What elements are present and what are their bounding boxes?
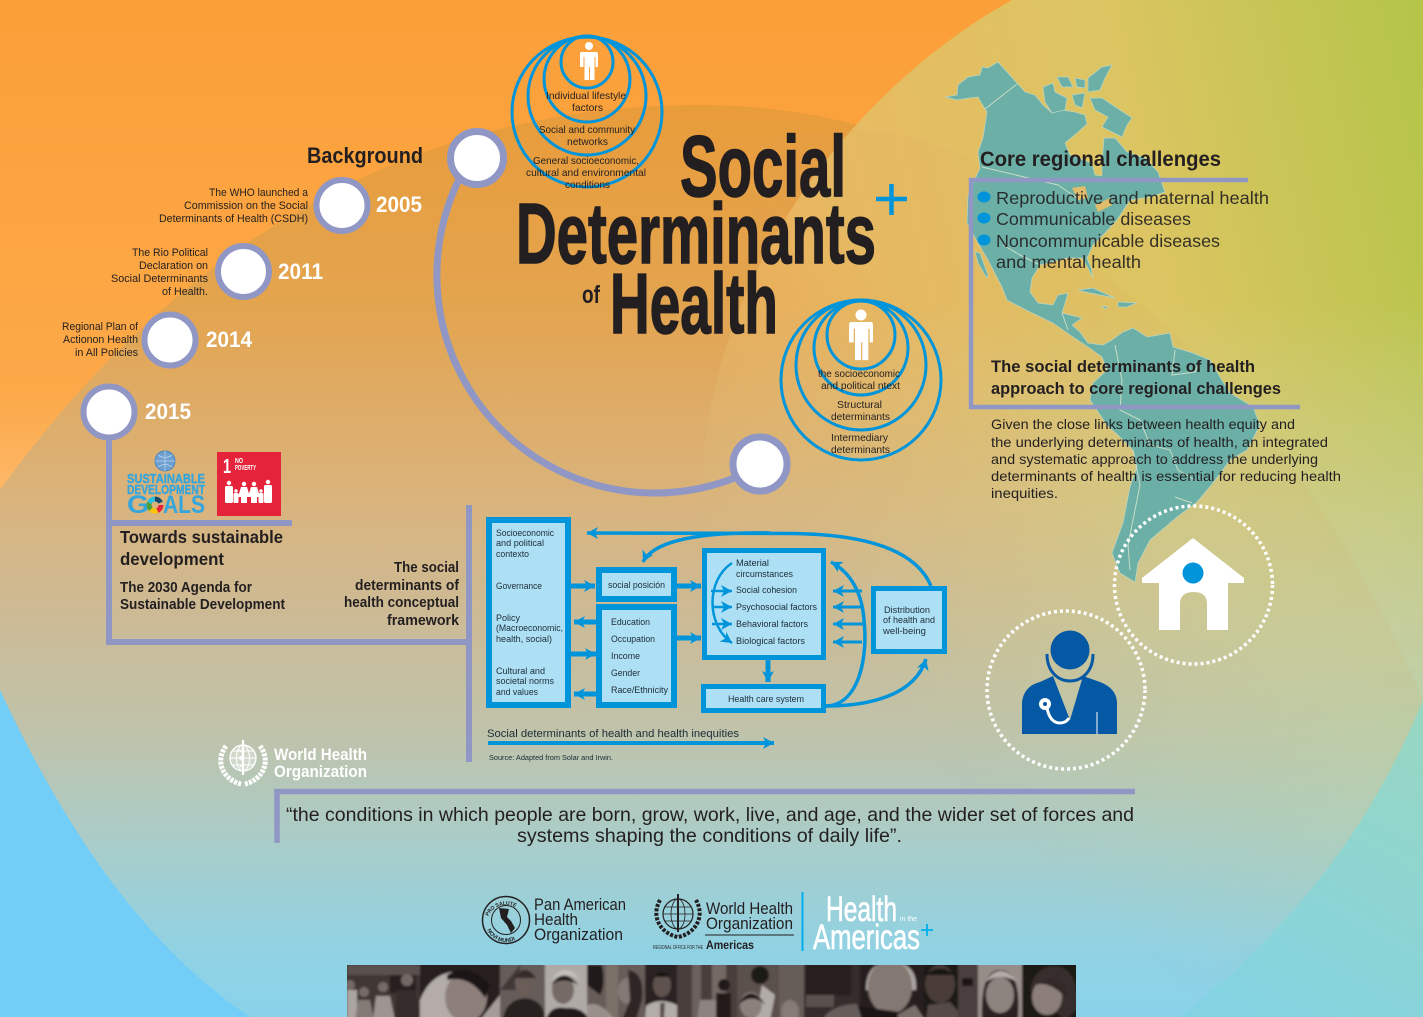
panel: context box: contexto — [496, 549, 529, 559]
panel: context box: Cultural and — [496, 666, 545, 676]
logo: world health organization americas: Organization — [706, 914, 793, 933]
text: towards sustainable development: Towards sustainable — [120, 527, 283, 547]
diagram: structural determinants circles: the socioeconomic — [818, 368, 900, 380]
timeline 2014: 2014 — [206, 327, 253, 352]
text: source: Source: Adapted from Solar and Irwin. — [489, 755, 613, 762]
logo: who white — [221, 740, 367, 784]
panel: context box: Policy — [496, 613, 520, 623]
panel: context box: health, social) — [496, 634, 552, 644]
panel: health care system box — [704, 686, 824, 710]
panel: factors box — [704, 550, 824, 658]
text: conceptual framework label: framework — [387, 613, 460, 629]
diagram: individual lifestyle circles: conditions — [565, 179, 610, 191]
timeline 2005 — [159, 180, 422, 231]
diagram: individual lifestyle circles: Social and community — [539, 124, 636, 136]
text: conceptual framework label: The social — [394, 560, 459, 576]
text: quote: systems shaping the conditions of daily life”. — [517, 825, 902, 847]
panel: factors box: Social cohesion — [736, 585, 797, 595]
diagram: structural determinants circles: determinants — [831, 444, 890, 456]
panel: stratifiers box — [599, 607, 674, 705]
logo: world health organization americas: Americas — [706, 938, 754, 952]
text: approach description: Given the close links between health equity and — [991, 416, 1295, 432]
text: towards sustainable development: Sustainable Development — [120, 597, 285, 613]
panel: health care system box: Health care system — [728, 694, 804, 704]
panel: factors box: Material — [736, 558, 769, 568]
photo strip — [345, 960, 1077, 1017]
timeline 2011 — [111, 246, 323, 298]
title: Health — [610, 257, 778, 352]
map of the Americas — [945, 62, 1260, 582]
logo: sustainable development goals — [127, 451, 205, 519]
panel: distribution box: well-being — [882, 626, 926, 636]
timeline 2005: 2005 — [376, 192, 422, 217]
list: core regional challenges: Noncommunicable diseases — [996, 231, 1220, 251]
heading: social determinants approach: The social determinants of health — [991, 357, 1255, 376]
diagram: individual lifestyle circles: networks — [567, 136, 608, 148]
panel: social position box: social posición — [608, 580, 665, 590]
diagram: structural determinants circles: Structural — [837, 399, 882, 411]
icon: doctor — [987, 611, 1145, 769]
timeline arc — [437, 132, 787, 493]
text: approach description — [991, 416, 1341, 501]
timeline 2011: Declaration on — [139, 260, 208, 272]
text: towards sustainable development: The 2030 Agenda for — [120, 580, 252, 596]
logo: world health organization americas: REGIONAL OFFICE FOR THE — [653, 945, 703, 951]
title: Social — [680, 119, 846, 215]
panel: factors box: Biological factors — [736, 636, 805, 646]
chart: conceptual framework — [487, 520, 944, 762]
heading: social determinants approach — [991, 357, 1281, 398]
logo: sustainable development goals: ALS — [163, 491, 205, 519]
panel: factors box: Behavioral factors — [736, 619, 808, 629]
timeline 2005: The WHO launched a — [209, 187, 309, 199]
logo: sustainable development goals: G — [127, 491, 149, 519]
title: Determinants — [516, 187, 876, 282]
logo: world health organization americas: World Health — [706, 899, 793, 918]
panel: context box: (Macroeconomic, — [496, 623, 563, 633]
logo: health in the americas: in the — [900, 916, 917, 923]
title — [516, 119, 907, 352]
title: of — [582, 281, 601, 309]
text: quote — [286, 804, 1134, 847]
panel: stratifiers box: Race/Ethnicity — [611, 685, 668, 695]
panel: distribution box: Distribution — [884, 605, 930, 615]
timeline 2014: Regional Plan of — [62, 321, 139, 333]
diagram: individual lifestyle circles: factors — [572, 102, 603, 114]
text: conceptual framework label: health conceptual — [344, 595, 459, 611]
diagram: individual lifestyle circles: Individual lifestyle — [546, 90, 626, 102]
timeline 2015 — [84, 386, 191, 438]
timeline 2011: Social Determinants — [111, 273, 208, 285]
text: quote: “the conditions in which people are born, grow, work, live, and age, and the wider set of forces and — [286, 804, 1134, 826]
panel: context box: and political — [496, 538, 544, 548]
list: core regional challenges: Reproductive and maternal health — [996, 188, 1269, 208]
timeline 2005: Commission on the Social — [184, 200, 308, 212]
panel: context box — [489, 520, 568, 705]
diagram: individual lifestyle circles — [512, 36, 662, 191]
logo: pan american health organization: Health — [534, 910, 578, 929]
text: conceptual framework label — [344, 560, 460, 629]
logo: health in the americas — [802, 890, 933, 957]
icon: sdg wheel — [149, 499, 161, 511]
list: core regional challenges — [978, 188, 1269, 272]
panel: stratifiers box: Gender — [611, 668, 640, 678]
diagram: individual lifestyle circles: cultural and environmental — [526, 167, 646, 179]
diagram: individual lifestyle circles: General socioeconomic, — [533, 155, 639, 167]
heading: social determinants approach: approach to core regional challenges — [991, 379, 1281, 398]
timeline 2011: 2011 — [278, 259, 323, 284]
list: core regional challenges: Communicable diseases — [996, 209, 1191, 229]
timeline 2005: Determinants of Health (CSDH) — [159, 213, 308, 225]
logo: health in the americas: Health — [826, 890, 897, 929]
label: social determinants arrow: Social determinants of health and health inequities — [487, 728, 739, 740]
logo: sustainable development goals: DEVELOPMENT — [127, 482, 205, 497]
panel: context box: and values — [496, 687, 538, 697]
heading: core regional challenges: Core regional challenges — [980, 148, 1221, 171]
diagram: structural determinants circles: and political ntext — [821, 380, 900, 392]
logo: pan american health organization — [482, 895, 626, 944]
panel: factors box: Psychosocial factors — [736, 602, 817, 612]
list: core regional challenges: and mental health — [996, 252, 1141, 272]
logo: health in the americas: Americas — [813, 918, 920, 957]
timeline 2014: in All Policies — [75, 347, 138, 359]
logo: pan american health organization: Organization — [534, 925, 623, 944]
logo: world health organization americas — [653, 894, 794, 952]
panel: distribution box: of health and — [883, 615, 935, 625]
icon: plus — [876, 184, 907, 215]
panel: stratifiers box: Education — [611, 617, 650, 627]
logo: who white: Organization — [274, 762, 367, 781]
logo: pan american health organization: Pan American — [534, 895, 626, 914]
heading: background: Background — [307, 143, 423, 168]
icon: no poverty goal: NO — [235, 458, 243, 465]
text: approach description: and systematic approach to address the underlying — [991, 451, 1318, 467]
panel: stratifiers box: Income — [611, 651, 640, 661]
diagram: structural determinants circles: Intermediary — [831, 432, 889, 444]
icon: no poverty goal: POVERTY — [235, 465, 256, 472]
text: approach description: the underlying determinants of health, an integrated — [991, 434, 1328, 450]
panel: context box: societal norms — [496, 676, 554, 686]
panel: context box: Socioeconomic — [496, 528, 554, 538]
icon: house — [1114, 506, 1272, 664]
diagram: structural determinants circles — [781, 300, 941, 460]
text: towards sustainable development — [120, 527, 285, 613]
panel frame: core challenges — [971, 180, 1300, 407]
text: approach description: inequities. — [991, 485, 1058, 501]
icon: no poverty goal — [217, 452, 281, 516]
logo: pan american health organization: PRO SALUTE — [485, 901, 517, 916]
timeline frame lines — [109, 436, 469, 762]
logo: sustainable development goals: SUSTAINABLE — [127, 471, 205, 486]
text: approach description: determinants of health is essential for reducing health — [991, 468, 1341, 484]
timeline 2014: Actionon Health — [63, 334, 138, 346]
timeline 2011: The Rio Political — [132, 247, 208, 259]
text: towards sustainable development: development — [120, 549, 224, 569]
panel: factors box: circumstances — [736, 569, 793, 579]
panel: context box: Governance — [496, 581, 542, 591]
logo: who white: World Health — [274, 745, 367, 764]
timeline 2011: of Health. — [162, 286, 208, 298]
diagram: structural determinants circles: determinants — [831, 411, 890, 423]
frame: quote — [277, 792, 1135, 843]
timeline 2014 — [62, 314, 253, 366]
panel: distribution box — [874, 588, 944, 652]
panel: social position box — [599, 570, 674, 599]
logo: pan american health organization: NOVI MUNDI — [487, 928, 515, 942]
text: conceptual framework label: determinants of — [355, 578, 459, 594]
arrows: framework flows — [571, 533, 931, 706]
timeline 2015: 2015 — [145, 399, 191, 424]
icon: no poverty goal: 1 — [223, 456, 231, 478]
panel: stratifiers box: Occupation — [611, 634, 655, 644]
